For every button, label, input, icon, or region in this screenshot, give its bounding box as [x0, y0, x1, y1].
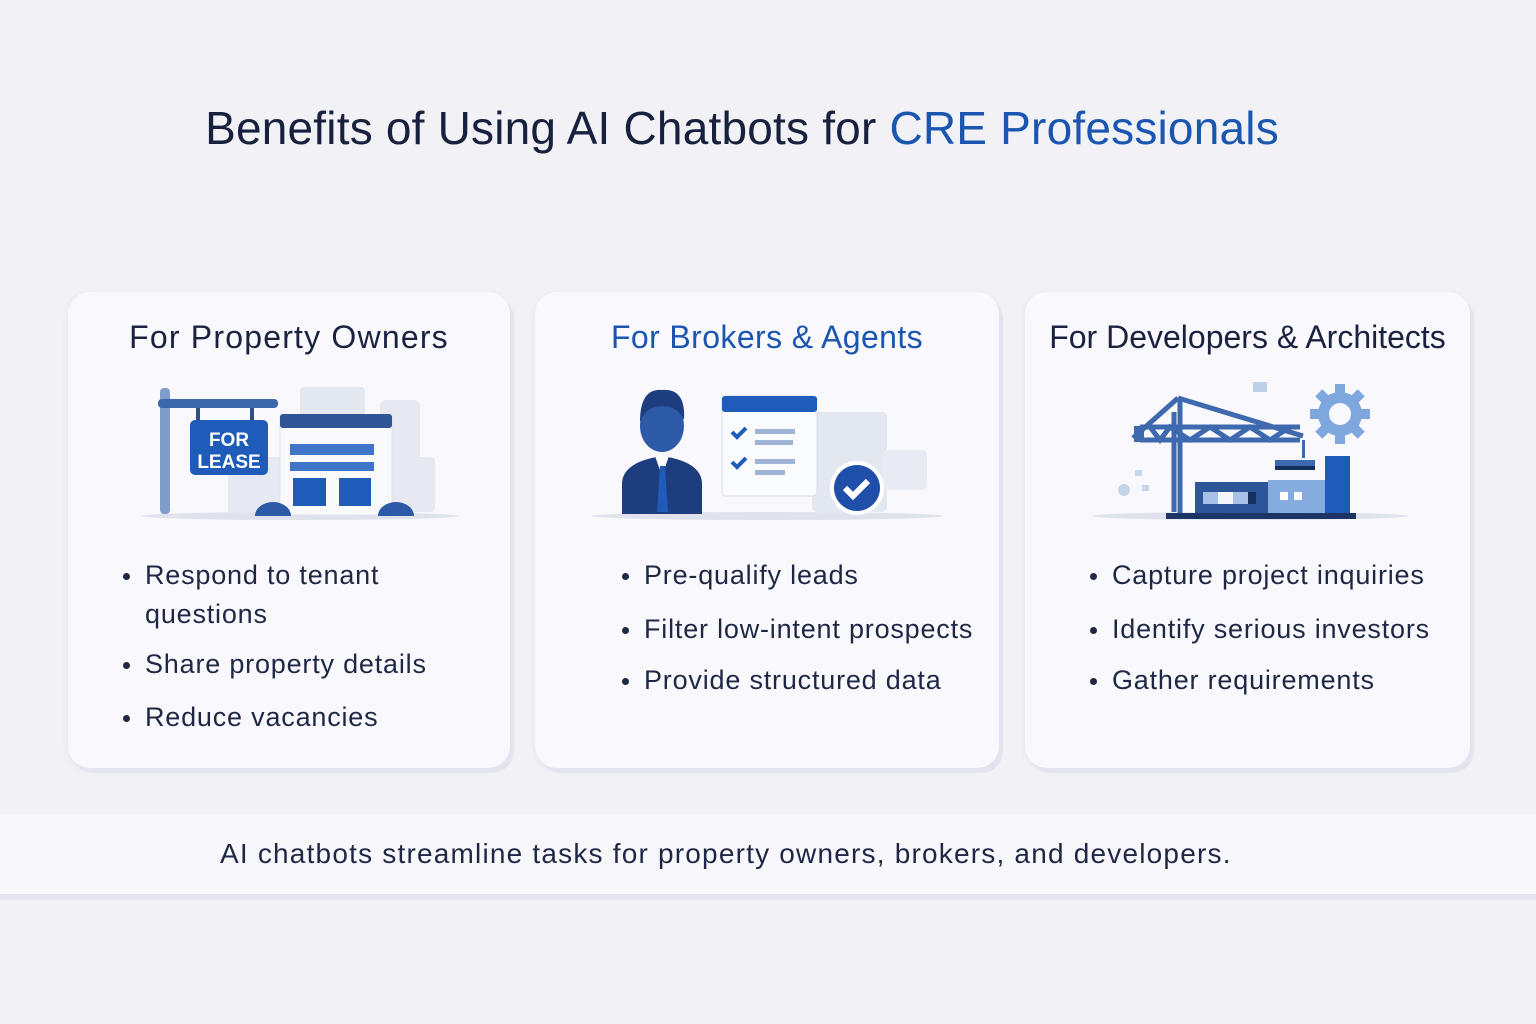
bullet list: brokers [622, 560, 973, 695]
panel: property owners [68, 292, 510, 768]
bullet list: brokers: Pre-qualify leads [644, 560, 859, 590]
title: Benefits of Using AI Chatbots for CRE Professionals [205, 102, 1279, 154]
bullet list: developers: Capture project inquiries [1112, 560, 1425, 590]
bullet list: owners: Share property details [145, 649, 427, 679]
footer summary banner [0, 814, 1536, 894]
bullet list: owners [123, 560, 427, 732]
bullet list: developers: Gather requirements [1112, 665, 1375, 695]
panel: brokers & agents [535, 292, 999, 768]
bullet list: owners: Respond to tenant [145, 560, 379, 590]
icon: for lease sign and building: LEASE [197, 452, 261, 473]
icon: crane and gear [1092, 382, 1408, 520]
bullet list: developers: Identify serious investors [1112, 614, 1430, 644]
icon: for lease sign and building: FOR [209, 430, 249, 451]
icon: agent with checklist [591, 390, 943, 520]
bullet list: developers [1090, 560, 1430, 695]
heading: developers: For Developers & Architects [1049, 319, 1446, 355]
heading: brokers: For Brokers & Agents [611, 319, 923, 355]
bullet list: brokers: Provide structured data [644, 665, 942, 695]
icon: for lease sign and building [142, 387, 458, 520]
bullet list: owners: questions [145, 599, 268, 629]
panel: developers & architects [1025, 292, 1470, 768]
bullet list: owners: Reduce vacancies [145, 702, 378, 732]
bullet list: brokers: Filter low-intent prospects [644, 614, 973, 644]
heading: property owners: For Property Owners [129, 319, 449, 355]
footer text: AI chatbots streamline tasks for property owners, brokers, and developers. [220, 838, 1232, 869]
